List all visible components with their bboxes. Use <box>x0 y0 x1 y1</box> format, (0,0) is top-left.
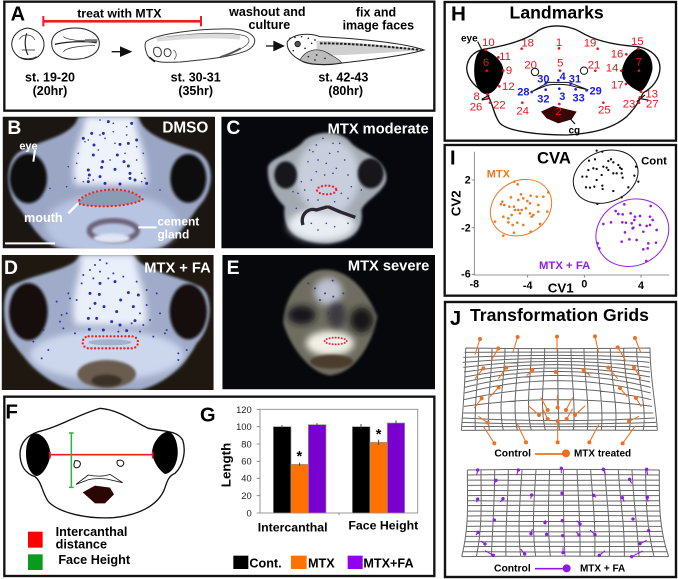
legend: intercanthal distance: distance <box>56 537 107 551</box>
red landmark numbers: 25 <box>598 105 611 117</box>
red landmark numbers: 8 <box>474 91 480 103</box>
panel letter D: D <box>4 258 18 279</box>
label: mouth <box>24 203 78 225</box>
red landmark numbers: 16 <box>611 48 623 60</box>
red landmark numbers: 2 <box>556 106 562 118</box>
bar chart: Face Height <box>348 519 418 533</box>
key: Control to MTX treated: Control <box>494 449 531 460</box>
blue landmark numbers: 30 <box>537 73 549 85</box>
label: treat with MTX: treat with MTX <box>77 7 162 21</box>
bar chart: 100 <box>236 422 252 432</box>
group: Cont: Cont <box>641 156 667 168</box>
blue landmark numbers: 31 <box>569 74 581 86</box>
group: Cont <box>565 141 667 213</box>
heading: Transformation Grids: Transformation Grids <box>470 305 649 325</box>
bar chart: 40 <box>241 474 252 484</box>
displacement vectors <box>476 468 648 557</box>
panel letter E: E <box>227 258 240 279</box>
red landmark numbers: 15 <box>631 36 644 48</box>
red landmark numbers: 7 <box>636 56 642 68</box>
stage labels <box>25 71 368 98</box>
label: fix and image faces: fix and <box>356 6 396 20</box>
label: DMSO: DMSO <box>162 120 208 137</box>
group: MTX: MTX <box>487 168 511 180</box>
red landmark points <box>486 48 641 104</box>
panel letter B: B <box>7 118 21 139</box>
face diagram <box>20 408 184 518</box>
panel H: landmarks <box>445 2 676 141</box>
label: MTX moderate: MTX moderate <box>328 121 429 137</box>
legend: face height: Face Height <box>58 553 131 567</box>
panel letter J: J <box>450 308 461 330</box>
stage labels: (35hr) <box>178 84 213 98</box>
heading: Landmarks: Landmarks <box>510 3 604 23</box>
red landmark numbers: 22 <box>493 99 506 111</box>
bar chart: * <box>376 427 382 443</box>
label: eye: eye <box>19 140 38 152</box>
red landmark numbers: 27 <box>646 99 659 111</box>
mouth outline <box>83 336 138 348</box>
stage labels: st. 42-43 <box>318 71 368 85</box>
axes <box>449 152 669 296</box>
face diagram <box>467 26 660 135</box>
MTX treated deformation grid <box>461 336 657 443</box>
legend: intercanthal distance: Intercanthal <box>56 525 127 539</box>
key: Control to MTX treated <box>494 449 631 460</box>
red landmark numbers: 19 <box>584 38 596 50</box>
blue landmark numbers: 29 <box>590 86 602 98</box>
panel F and G frame <box>4 397 434 576</box>
red landmark numbers: 11 <box>499 51 511 63</box>
panel letter C: C <box>226 118 240 139</box>
axes: 4 <box>638 280 644 292</box>
panel I: CVA scatter plot <box>445 141 678 296</box>
red landmark numbers: 20 <box>524 59 537 71</box>
icon: tadpole stage 42-43 <box>287 34 424 65</box>
panel letter H: H <box>451 3 466 26</box>
axes: 0 <box>581 279 587 291</box>
red landmark numbers: 9 <box>506 65 512 77</box>
bar chart: 60 <box>241 457 252 467</box>
chart legend <box>233 556 414 571</box>
red landmark numbers <box>470 36 659 118</box>
treatment bar <box>43 16 201 26</box>
blue landmark numbers: 4 <box>560 71 567 83</box>
blue landmark numbers: 33 <box>573 93 585 105</box>
label: MTX + FA: MTX + FA <box>144 261 211 277</box>
label: MTX severe: MTX severe <box>348 259 429 275</box>
label: washout and culture: washout and <box>229 5 305 19</box>
red landmark numbers: 10 <box>482 37 495 49</box>
label: cement gland <box>138 218 200 241</box>
label: eye <box>20 144 38 162</box>
icon: embryo stage 19-20 front <box>12 28 44 60</box>
blue landmark points <box>532 80 587 92</box>
axes: -4 <box>523 280 532 292</box>
red landmark numbers: 17 <box>611 79 624 91</box>
label: cg: cg <box>569 125 580 136</box>
chart legend: Cont. <box>249 557 282 571</box>
axes: -8 <box>470 279 479 291</box>
panel letter F: F <box>5 400 18 423</box>
panel letter G: G <box>200 405 216 427</box>
group: MTX + FA: MTX + FA <box>539 260 590 272</box>
arrow <box>112 47 131 56</box>
red landmark numbers: 6 <box>483 57 489 69</box>
stage labels: st. 19-20 <box>25 71 75 85</box>
stage labels: st. 30-31 <box>171 71 221 85</box>
heading: CVA: CVA <box>537 148 571 167</box>
mouth outline <box>317 186 336 194</box>
group: MTX <box>480 168 562 247</box>
key: Control to MTX treated: MTX treated <box>574 449 631 460</box>
panel E: MTX severe photo <box>222 255 435 389</box>
key: Control to MTX + FA <box>494 563 625 574</box>
axes: -2 <box>461 222 471 234</box>
bar chart <box>218 405 418 534</box>
icon: tadpole stage 30-31 <box>145 29 255 62</box>
axes: -6 <box>461 269 471 281</box>
bar chart: Length <box>218 443 233 487</box>
legend: intercanthal distance <box>28 525 127 551</box>
red landmark numbers: 21 <box>588 59 600 71</box>
bar chart: Intercanthal <box>258 520 328 534</box>
label: eye: eye <box>461 34 478 45</box>
scale bar <box>5 242 55 244</box>
label: cement gland: gland <box>157 227 189 241</box>
key: Control to MTX + FA: Control <box>494 563 531 574</box>
panel letter I: I <box>450 147 456 169</box>
label: washout and culture: culture <box>249 18 290 32</box>
bar chart: 120 <box>236 405 252 415</box>
label: cement gland: cement <box>157 215 199 229</box>
group: MTX + FA <box>539 186 678 279</box>
blue landmark numbers: 28 <box>517 86 529 98</box>
red landmark numbers: 12 <box>502 81 515 93</box>
arrow <box>266 42 283 50</box>
panel letter A: A <box>11 4 25 26</box>
key: Control to MTX + FA: MTX + FA <box>580 563 625 574</box>
chart legend: MTX <box>308 557 335 571</box>
red landmark numbers: 13 <box>645 88 658 100</box>
label: mouth: mouth <box>24 211 63 225</box>
panel A: treatment timeline <box>4 2 434 111</box>
legend: face height <box>28 553 131 570</box>
panel C: MTX moderate photo <box>221 117 433 248</box>
MTX + FA deformation grid <box>462 468 669 557</box>
mouth outline <box>325 338 347 344</box>
red landmark numbers: 23 <box>623 99 635 111</box>
axes: CV1 <box>548 281 574 296</box>
panel B: DMSO photo <box>3 117 215 257</box>
mouth outline <box>79 190 143 206</box>
panel J: transformation grids <box>445 302 676 577</box>
bar chart: 80 <box>241 439 252 449</box>
red landmark numbers: 5 <box>557 58 563 70</box>
red landmark numbers: 18 <box>521 38 534 50</box>
red landmark numbers: 14 <box>606 63 618 75</box>
chart legend: MTX+FA <box>363 557 414 571</box>
icon: embryo stage 19-20 dorsal <box>52 28 99 59</box>
red landmark numbers: 1 <box>556 37 562 49</box>
label: fix and image faces: image faces <box>343 18 414 32</box>
panel D: MTX + FA photo <box>2 255 214 390</box>
displacement vectors <box>474 336 641 443</box>
blue landmark numbers: 32 <box>537 93 549 105</box>
blue landmark numbers <box>517 71 602 105</box>
bar chart: 20 <box>241 491 252 501</box>
axes: 2 <box>465 175 471 187</box>
red landmark numbers: 26 <box>470 102 482 114</box>
axes: CV2 <box>449 190 464 216</box>
bar chart: * <box>296 449 302 465</box>
stage labels: (80hr) <box>328 84 363 98</box>
bar chart: 0 <box>246 508 252 518</box>
red landmark numbers: 24 <box>516 105 529 117</box>
stage labels: (20hr) <box>33 84 67 98</box>
blue landmark numbers: 3 <box>559 91 565 103</box>
